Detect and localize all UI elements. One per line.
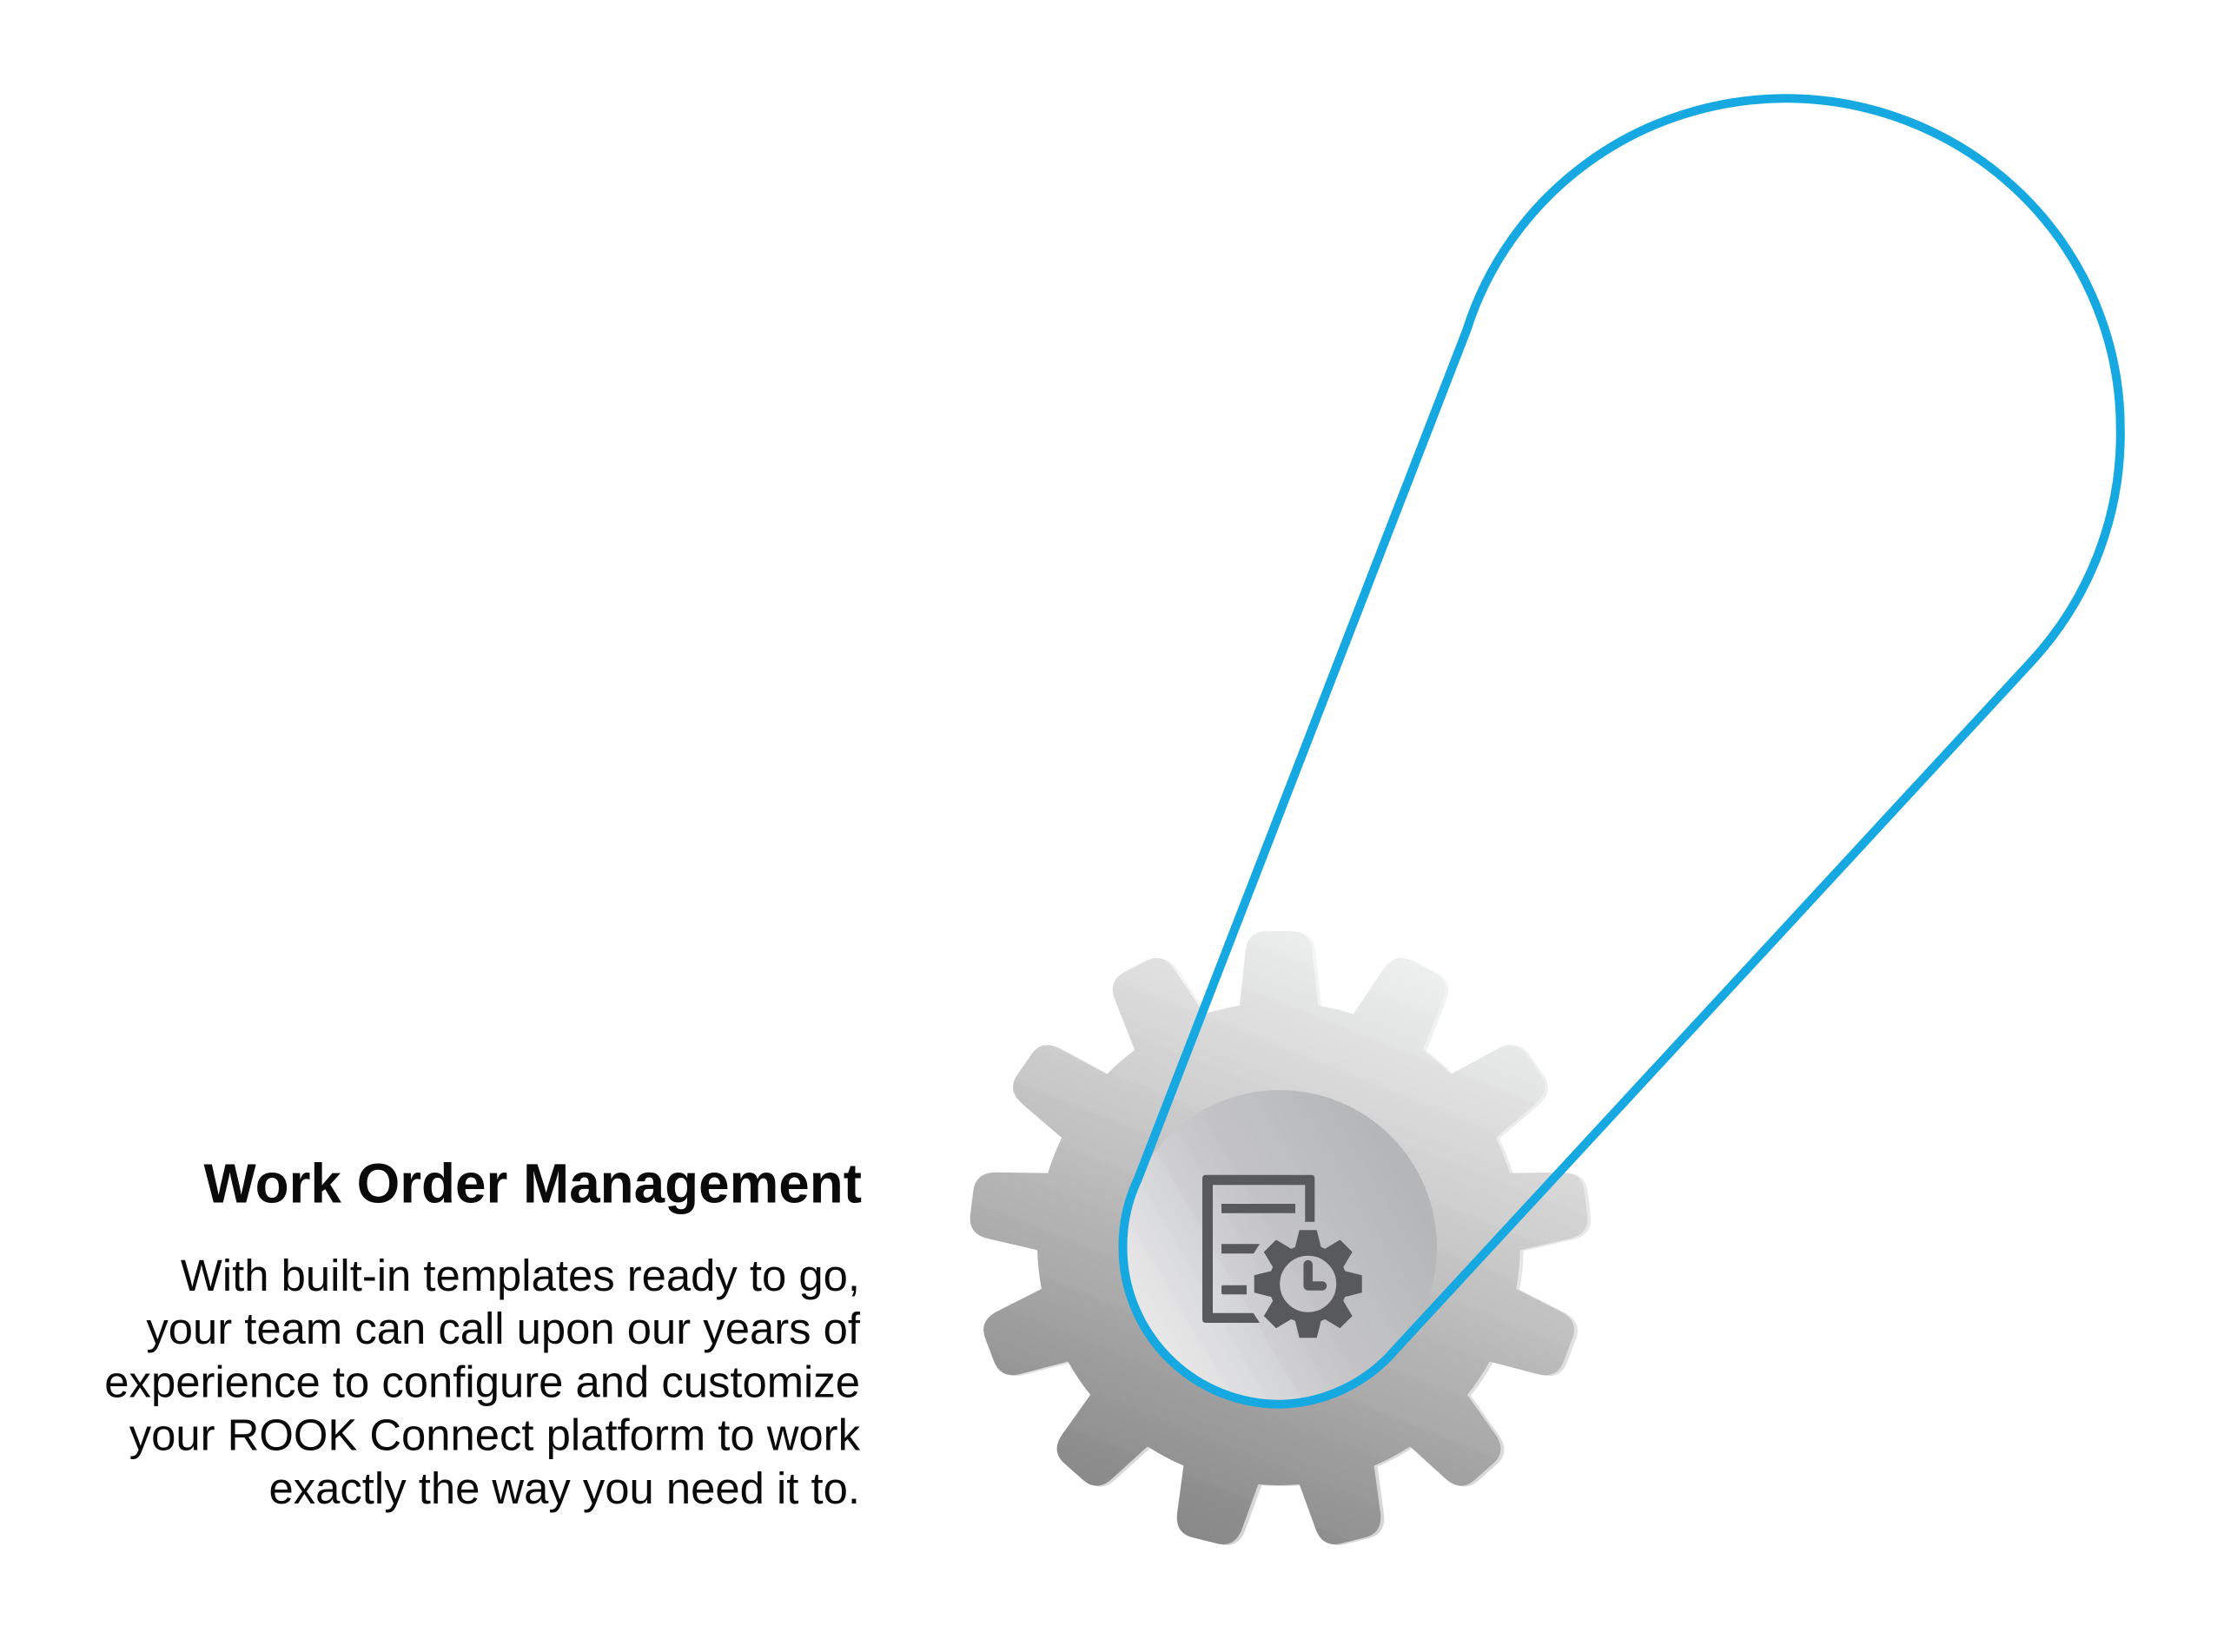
heading: Work Order Management xyxy=(204,1152,862,1214)
body text: With built-in templates ready to go, xyxy=(181,1251,860,1300)
icon: work order document with clock gear xyxy=(1202,1175,1362,1338)
blue teardrop outline xyxy=(1122,98,2121,1404)
body text: your ROOK Connect platform to work xyxy=(129,1411,861,1460)
gear inner disc xyxy=(1122,1090,1437,1404)
body text: your team can call upon our years of xyxy=(146,1304,861,1353)
icon: small gear with clock xyxy=(1254,1230,1362,1338)
body text: experience to configure and customize xyxy=(104,1357,860,1406)
body text xyxy=(104,1251,861,1513)
large gear xyxy=(970,931,1592,1545)
body text: exactly the way you need it to. xyxy=(269,1464,860,1513)
icon: document outline xyxy=(1202,1175,1314,1323)
icon: document text lines xyxy=(1221,1204,1295,1294)
